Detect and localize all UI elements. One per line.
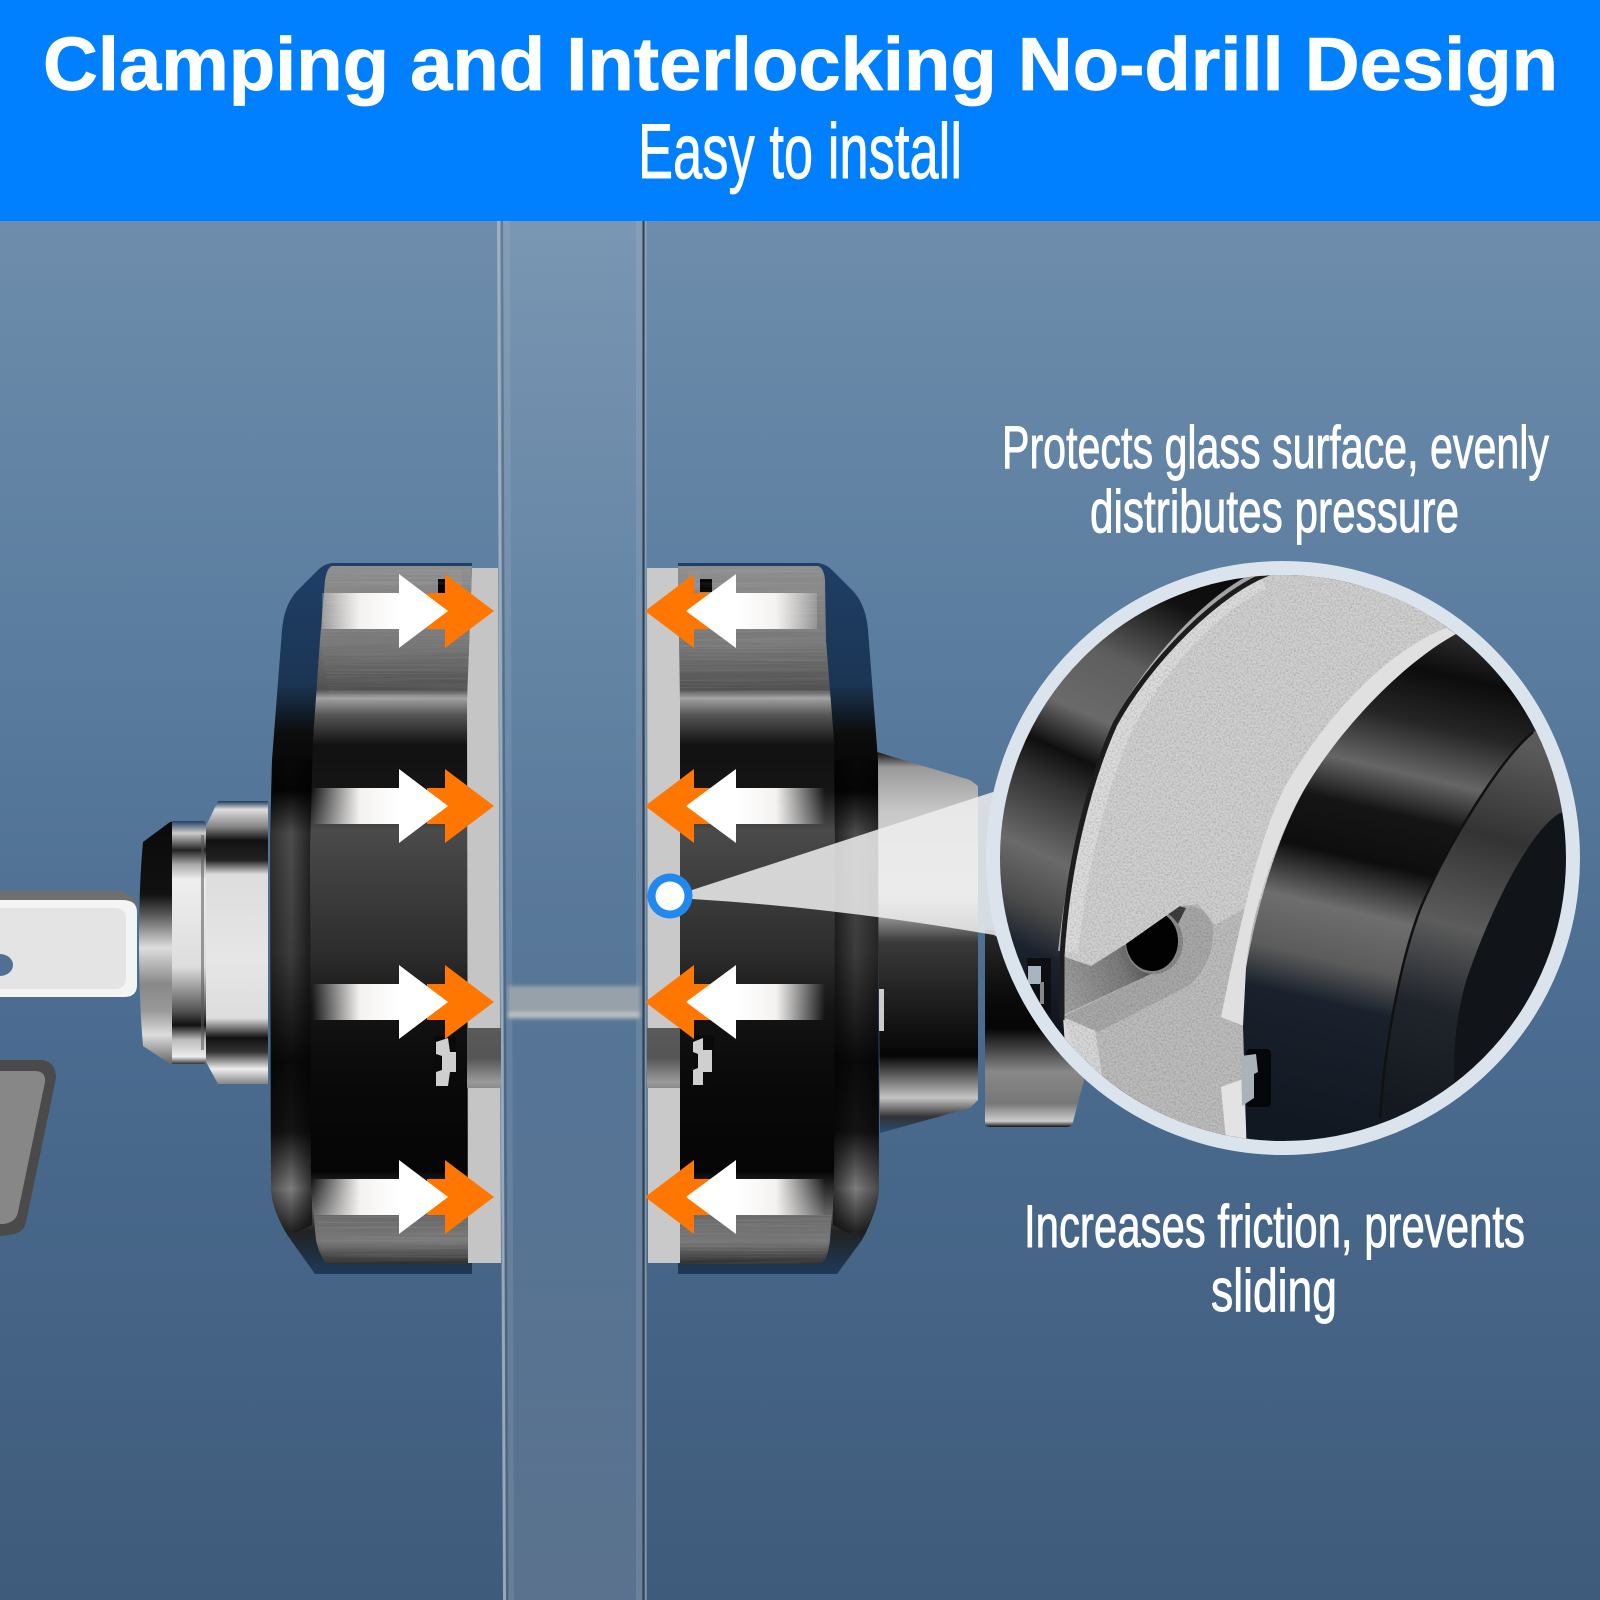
right arrow row 3 bbox=[645, 965, 825, 1039]
left top clip bbox=[438, 570, 462, 593]
callout: increases friction bbox=[1024, 1193, 1525, 1324]
magnified right metal bbox=[1243, 634, 1562, 1140]
pressure arrows: left side bbox=[312, 574, 494, 1234]
magnified lower gasket bbox=[1064, 575, 1508, 1140]
callout: protects glass surface: distributes pressure bbox=[1090, 478, 1459, 545]
magnified lighter lower edge bbox=[1063, 1018, 1102, 1076]
right arrow row 4 bbox=[645, 1160, 825, 1234]
pressure arrows: right side bbox=[645, 574, 825, 1234]
subtitle: Easy to install bbox=[638, 107, 962, 195]
magnified dark arc edge bbox=[1062, 572, 1272, 1020]
key blade bbox=[0, 891, 137, 997]
left arrow row 4 bbox=[312, 1160, 494, 1234]
lock screw through glass bbox=[508, 986, 640, 1019]
magnified bump around hole bbox=[1063, 906, 1213, 1032]
key hole bbox=[0, 954, 13, 976]
callout: increases friction: sliding bbox=[1211, 1257, 1337, 1324]
left arrow row 1 bbox=[322, 574, 494, 648]
glass panel bbox=[497, 221, 647, 1600]
magnified lower rim patch bbox=[1221, 1079, 1247, 1142]
magnified slot bbox=[1063, 905, 1186, 1015]
magnified hole bbox=[1125, 910, 1183, 974]
magnified step edge highlight bbox=[1380, 732, 1533, 1119]
magnifier ring bbox=[993, 568, 1573, 1148]
chrome lock cylinder bbox=[139, 801, 268, 1084]
magnifier metal background bbox=[999, 574, 1567, 1142]
left lock body bbox=[270, 563, 501, 1274]
magnified gasket speckle texture bbox=[1060, 570, 1460, 1160]
right side set screw bbox=[879, 989, 884, 1031]
left body outer ring bbox=[270, 563, 472, 1274]
magnified right clip bbox=[1241, 1049, 1271, 1107]
right middle clip bbox=[693, 1035, 714, 1086]
magnified second step bbox=[1394, 731, 1562, 1105]
magnifier circle bbox=[986, 561, 1580, 1155]
right arrow row 2 bbox=[645, 769, 825, 843]
magnified gasket rim bbox=[1221, 628, 1456, 1026]
left middle clip bbox=[434, 1036, 456, 1088]
left gasket strip bbox=[467, 568, 501, 1263]
left arrow row 2 bbox=[312, 769, 494, 843]
right cone collar bbox=[877, 752, 978, 1133]
right body front face bbox=[678, 566, 835, 1264]
magnified inside bbox=[1027, 575, 1566, 1140]
callout beam from marker to magnifier bbox=[692, 792, 1010, 945]
right thumb-turn bbox=[985, 930, 1090, 1127]
second key bow bbox=[0, 1060, 56, 1236]
left body front face bbox=[310, 566, 472, 1264]
marker dot bbox=[648, 874, 692, 918]
right gasket strip bbox=[647, 568, 680, 1263]
right top clip bbox=[688, 570, 712, 592]
right lock body bbox=[647, 563, 1090, 1274]
magnified left clip bbox=[1027, 958, 1051, 1014]
brushed metal texture on body faces bbox=[300, 560, 840, 1270]
title: Clamping and Interlocking No-drill Design bbox=[43, 22, 1558, 106]
right arrow row 1 bbox=[645, 574, 817, 648]
magnified upper gasket bbox=[1064, 575, 1482, 966]
left arrow row 3 bbox=[312, 965, 494, 1039]
right body outer ring bbox=[678, 563, 879, 1274]
header banner bbox=[0, 0, 1600, 221]
magnified gasket left highlight bbox=[1068, 580, 1262, 952]
magnified inner recess bbox=[1454, 812, 1566, 1084]
callout: protects glass surface bbox=[1002, 414, 1549, 545]
